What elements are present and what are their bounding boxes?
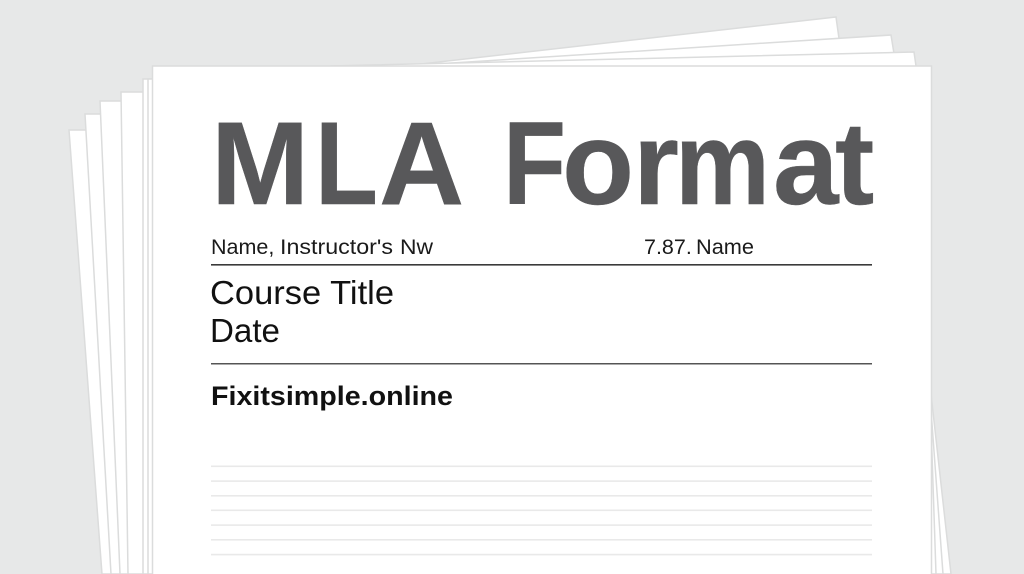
page sheet: [152, 66, 932, 574]
sheet: left fan 2: [85, 114, 160, 574]
title: L: [315, 98, 378, 230]
sheet: left fan 4: [121, 92, 160, 574]
text: website: Fixitsimple.online: [211, 381, 453, 411]
sheet: top right, rear: [400, 17, 900, 200]
text: number and name: 7.87.: [644, 235, 692, 259]
title: A: [379, 98, 473, 230]
title: F: [503, 98, 566, 230]
sheet: top right, front: [331, 52, 916, 200]
sheet: left fan 5: [143, 79, 160, 574]
sheet: left fan 1: [69, 130, 160, 574]
divider: header rule: [211, 264, 872, 266]
title: at: [773, 98, 874, 230]
text: number and name: Name: [696, 235, 754, 259]
title: M: [211, 98, 309, 230]
sheet: right edge, inner: [900, 424, 936, 574]
sheet: left fan 3: [100, 101, 160, 574]
title: m: [675, 98, 770, 230]
panel: front page: [152, 66, 932, 574]
text: course title: Course Title: [210, 274, 394, 311]
ruled blank lines: [211, 466, 872, 555]
sheet: right edge, outer: [900, 385, 951, 574]
text: name and instructor: Name,: [211, 235, 274, 259]
text: name and instructor: Instructor's: [280, 235, 393, 259]
text: name and instructor: Nw: [400, 235, 433, 259]
sheet: left fan 6: [148, 79, 160, 574]
text: date: Date: [210, 312, 280, 349]
sheet: top right, middle: [400, 35, 900, 200]
title: or: [562, 98, 679, 230]
sheet: right edge, middle: [900, 410, 943, 574]
divider: section rule: [211, 363, 872, 364]
